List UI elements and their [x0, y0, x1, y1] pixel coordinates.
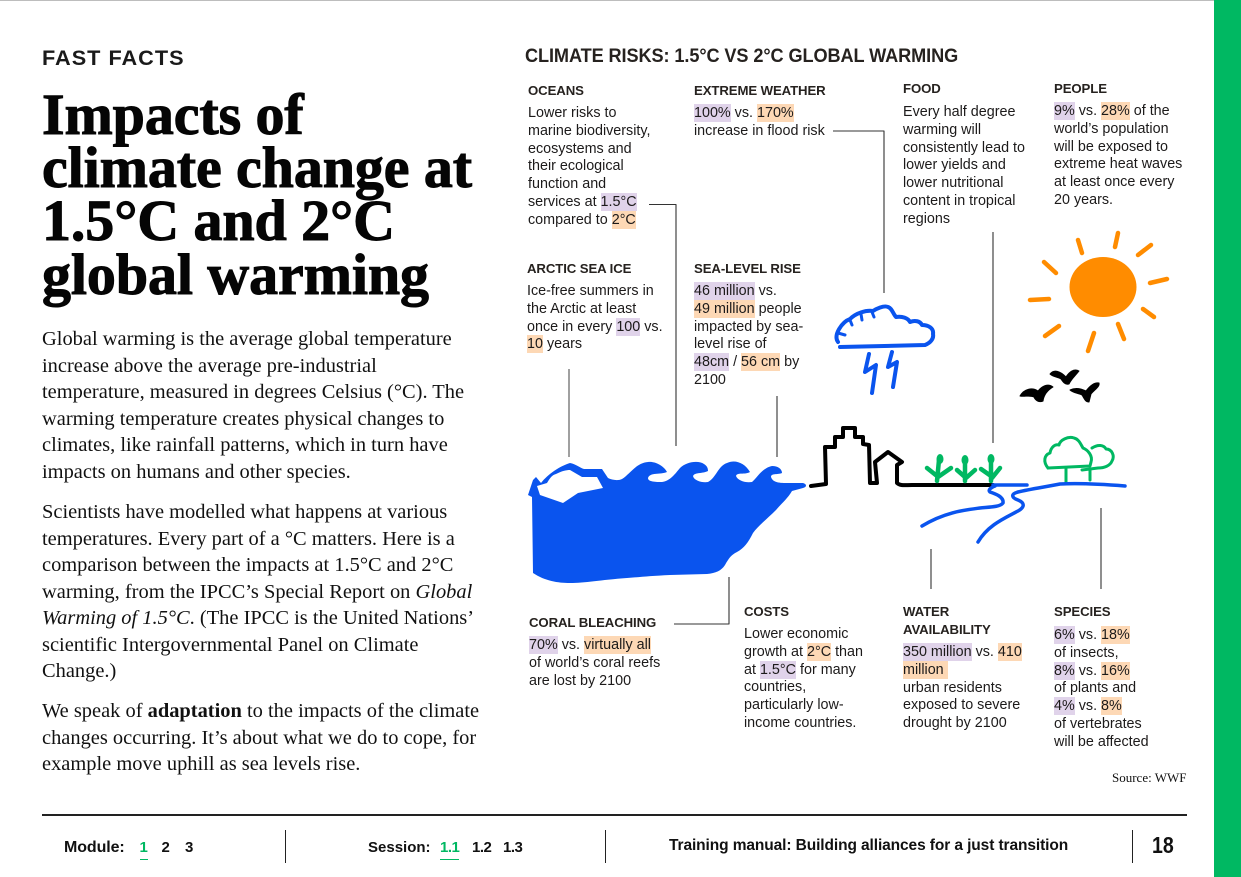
- text: food: lower nutritional: [903, 175, 1003, 191]
- section label: fast facts: FAST FACTS: [42, 45, 185, 70]
- footer: module navigation: Module:: [64, 839, 125, 856]
- text: water availability: drought by 2100: [903, 715, 1007, 731]
- text: water availability: 350 million vs. 410: [903, 644, 1022, 660]
- text: food: Every half degree: [903, 104, 1015, 120]
- text: oceans: compared to 2°C: [528, 212, 636, 228]
- second text block: temperatures. Every part of a °C matters. Here is a: [42, 528, 455, 550]
- footer divider: [285, 830, 286, 863]
- text: sea-level rise: level rise of: [694, 336, 767, 352]
- text: people: 9% vs. 28% of the: [1054, 103, 1170, 119]
- text: coral bleaching: [529, 636, 660, 688]
- footer: module navigation: 2: [162, 839, 170, 856]
- text: species: of vertebrates: [1054, 716, 1142, 732]
- heading: coral bleaching: CORAL BLEACHING: [529, 615, 656, 630]
- panel: species: [1054, 604, 1149, 750]
- top edge line: [0, 0, 1214, 1]
- heading: sea-level rise: SEA-LEVEL RISE: [694, 261, 801, 276]
- source note: Source: WWF: [1112, 770, 1186, 785]
- adaptation text block: We speak of adaptation to the impacts of the climate: [42, 700, 479, 722]
- panel: extreme weather: [694, 83, 826, 139]
- text: extreme weather: increase in flood risk: [694, 123, 825, 139]
- icon: sea with waves and iceberg: [528, 461, 806, 583]
- heading: food: FOOD: [903, 81, 941, 96]
- intro text block: temperature, measured in degrees Celsius (°C). The: [42, 381, 464, 403]
- text: people: will be exposed to: [1054, 138, 1168, 154]
- footer: session navigation: [368, 839, 522, 860]
- title: climate change at: [42, 135, 472, 200]
- icon: birds: [1020, 370, 1099, 402]
- text: food: consistently lead to: [903, 140, 1025, 156]
- text: species: [1054, 626, 1149, 750]
- text: sea-level rise: [694, 282, 803, 388]
- text: food: lower yields and: [903, 157, 1006, 173]
- intro text block: Global warming is the average global temperature: [42, 328, 452, 350]
- text: water availability: million: [903, 662, 944, 678]
- adaptation text block: changes occurring. It’s about what we do to cope, for: [42, 726, 476, 748]
- green side bar: [1214, 0, 1241, 877]
- footer: module navigation: [64, 839, 193, 860]
- text: species: will be affected: [1054, 734, 1149, 750]
- text: species: 8% vs. 16%: [1054, 662, 1130, 678]
- panel: food: [903, 81, 1025, 226]
- text: oceans: ecosystems and: [528, 140, 632, 156]
- icon: storm cloud: [837, 306, 933, 393]
- text: oceans: their ecological: [528, 158, 624, 174]
- panel: arctic sea ice: [527, 261, 663, 353]
- text: arctic sea ice: 10 years: [527, 336, 582, 352]
- footer: manual title: Training manual: Building alliances for a just transition: [669, 837, 1068, 854]
- intro text block: increase above the average pre-industrial: [42, 354, 377, 376]
- footer divider: [1132, 830, 1133, 863]
- text: arctic sea ice: the Arctic at least: [527, 301, 636, 317]
- heading: people: PEOPLE: [1054, 81, 1107, 96]
- footer: session navigation: 1.3: [503, 839, 522, 856]
- panel: coral bleaching: [529, 615, 660, 688]
- intro text block: impacts on humans and other species.: [42, 460, 351, 482]
- text: water availability: exposed to severe: [903, 697, 1020, 713]
- title: global warming: [42, 242, 429, 307]
- footer: session navigation: 1.2: [472, 839, 491, 856]
- second text block: Scientists have modelled what happens at various: [42, 501, 447, 523]
- heading: water availability: [903, 604, 991, 637]
- heading: arctic sea ice: ARCTIC SEA ICE: [527, 261, 631, 276]
- text: arctic sea ice: Ice-free summers in: [527, 283, 654, 299]
- title: [42, 82, 472, 308]
- heading: species: SPECIES: [1054, 604, 1110, 619]
- footer: module navigation: 3: [185, 839, 193, 856]
- text: oceans: Lower risks to: [528, 105, 616, 121]
- icon: crops: [927, 454, 1000, 481]
- text: people: world’s population: [1054, 121, 1169, 137]
- text: oceans: function and: [528, 176, 606, 192]
- text: oceans: marine biodiversity,: [528, 123, 650, 139]
- title: Impacts of: [42, 82, 304, 147]
- text: species: of plants and: [1054, 680, 1136, 696]
- second text block: warming, from the IPCC’s Special Report on Global: [42, 580, 472, 602]
- chart heading: CLIMATE RISKS: 1.5°C VS 2°C GLOBAL WARMING: [525, 45, 958, 67]
- text: food: regions: [903, 210, 950, 226]
- second text block: Change.): [42, 660, 116, 682]
- second text block: scientific Intergovernmental Panel on Climate: [42, 634, 418, 656]
- text: food: warming will: [903, 122, 981, 138]
- text: coral bleaching: are lost by 2100: [529, 672, 631, 688]
- text: species: of insects,: [1054, 645, 1119, 661]
- intro text block: climates, like rainfall patterns, which in turn have: [42, 434, 448, 456]
- text: species: 6% vs. 18%: [1054, 627, 1130, 643]
- text: people: 20 years.: [1054, 192, 1113, 208]
- footer: session navigation: 1.1: [440, 839, 459, 856]
- text: costs: income countries.: [744, 715, 856, 731]
- text: oceans: services at 1.5°C: [528, 194, 637, 210]
- illustration: climate landscape: [528, 130, 1170, 624]
- text: costs: [744, 626, 863, 731]
- second text block: comparison between the impacts at 1.5°C and 2°C: [42, 554, 453, 576]
- text: extreme weather: 100% vs. 170%: [694, 105, 794, 121]
- text: extreme weather: [694, 104, 825, 139]
- adaptation text block: example move uphill as sea levels rise.: [42, 753, 360, 775]
- text: water availability: [903, 643, 1022, 731]
- footer rule: [42, 814, 1187, 816]
- text: people: [1054, 102, 1182, 208]
- footer: session navigation: Session:: [368, 839, 431, 856]
- text: sea-level rise: 46 million vs.: [694, 283, 777, 299]
- adaptation text block: [42, 700, 479, 775]
- text: coral bleaching: 70% vs. virtually all: [529, 637, 651, 653]
- intro text block: [42, 328, 464, 482]
- text: sea-level rise: 2100: [694, 372, 726, 388]
- connector lines: [569, 131, 1101, 624]
- text: costs: at 1.5°C for many: [744, 662, 856, 678]
- text: food: content in tropical: [903, 193, 1015, 209]
- text: arctic sea ice: once in every 100 vs.: [527, 318, 663, 334]
- icon: river: [922, 484, 1125, 542]
- heading: costs: COSTS: [744, 604, 789, 619]
- footer divider: [605, 830, 606, 863]
- text: water availability: urban residents: [903, 680, 1002, 696]
- text: costs: Lower economic: [744, 626, 848, 642]
- text: sea-level rise: 48cm / 56 cm by: [694, 354, 799, 370]
- text: arctic sea ice: [527, 283, 663, 353]
- footer: module navigation: 1: [140, 839, 148, 856]
- panel: people: [1054, 81, 1182, 208]
- icon: trees: [1045, 437, 1113, 482]
- panel: water availability: [903, 604, 1022, 731]
- text: sea-level rise: 49 million people: [694, 301, 802, 317]
- second text block: Warming of 1.5°C. (The IPCC is the United Nations’: [42, 607, 474, 629]
- icon: factory and house: [811, 428, 993, 486]
- text: sea-level rise: impacted by sea-: [694, 318, 803, 334]
- page number: 18: [1152, 832, 1174, 858]
- heading: water availability: WATER: [903, 604, 949, 619]
- text: oceans: [528, 105, 650, 229]
- heading: extreme weather: EXTREME WEATHER: [694, 83, 826, 98]
- text: coral bleaching: of world’s coral reefs: [529, 655, 660, 671]
- heading: water availability: AVAILABILITY: [903, 622, 991, 637]
- panel: sea-level rise: [694, 261, 803, 388]
- title: 1.5°C and 2°C: [42, 188, 395, 253]
- text: costs: growth at 2°C than: [744, 644, 863, 660]
- heading: oceans: OCEANS: [528, 83, 584, 98]
- intro text block: warming temperature creates physical changes to: [42, 408, 444, 430]
- text: costs: countries,: [744, 679, 806, 695]
- panel: oceans: [528, 83, 650, 229]
- text: people: extreme heat waves: [1054, 156, 1182, 172]
- panel: costs: [744, 604, 863, 731]
- text: species: 4% vs. 8%: [1054, 698, 1122, 714]
- text: costs: particularly low-: [744, 697, 844, 713]
- text: people: at least once every: [1054, 174, 1174, 190]
- icon: sun: [1030, 233, 1167, 351]
- text: food: [903, 104, 1025, 226]
- second text block: [42, 501, 474, 682]
